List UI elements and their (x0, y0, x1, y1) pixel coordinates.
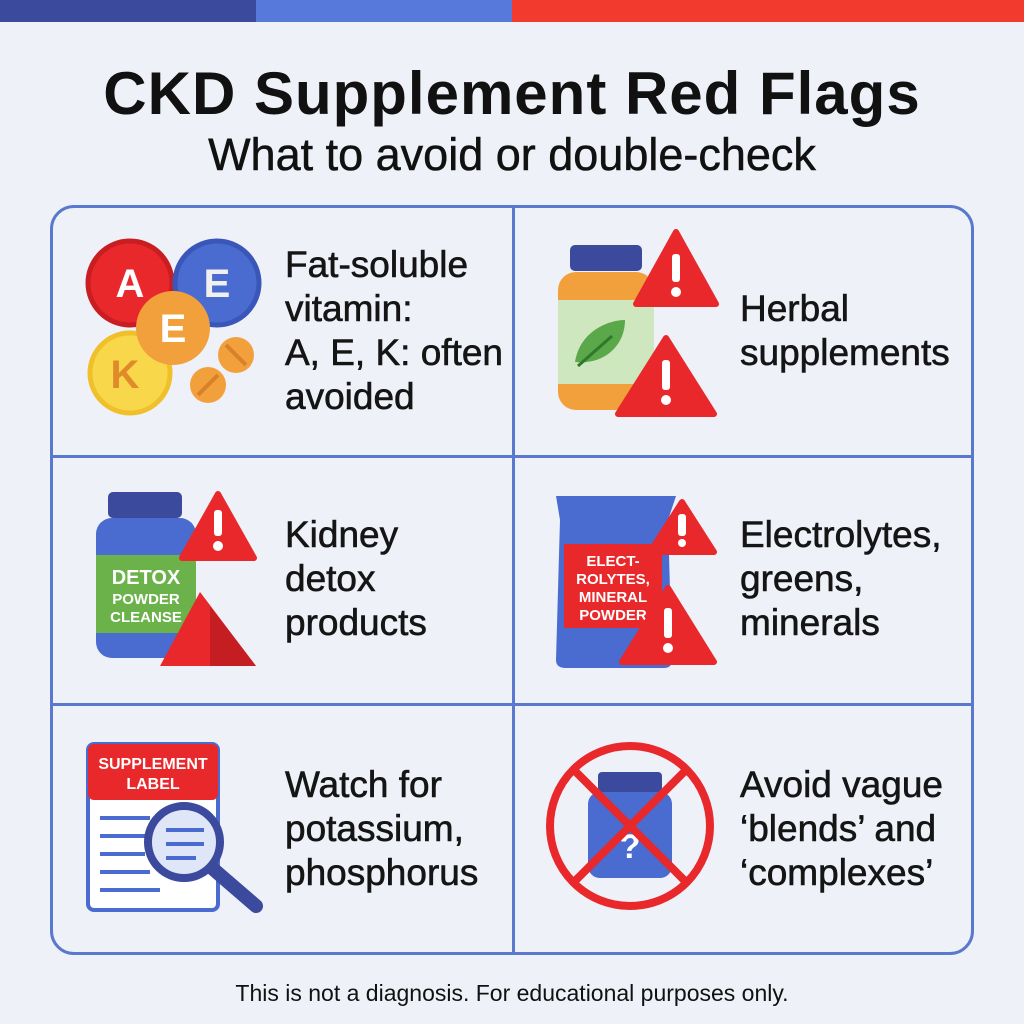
icon: supplement label with magnifier: SUPPLEMENT (98, 756, 208, 773)
icon: supplement label with magnifier (88, 744, 256, 910)
icon: detox bottle: POWDER (112, 591, 180, 608)
icon: supplement label with magnifier: LABEL (126, 776, 180, 793)
grid panel (50, 205, 974, 955)
icon: vitamins: E (204, 262, 230, 306)
text: herbal supplements: Herbal supplements (740, 288, 950, 373)
footer disclaimer: This is not a diagnosis. For educational purposes only. (235, 980, 789, 1006)
icon: electrolyte pouch: ROLYTES, (576, 571, 650, 588)
icon: electrolyte pouch: ELECT- (586, 553, 640, 570)
icon: prohibited blend jar: ? (620, 828, 640, 866)
text: fat-soluble vitamins: A, E, K: often avoided (285, 332, 503, 417)
subtitle: What to avoid or double-check (208, 129, 816, 180)
icon: vitamins: K (111, 353, 140, 397)
icon: vitamins: E (160, 307, 186, 351)
text: vague blends: Avoid vague ‘blends’ and ‘complexes’ (740, 764, 943, 893)
text: potassium phosphorus: Watch for potassium, phosphorus (285, 764, 478, 893)
title: CKD Supplement Red Flags (103, 60, 921, 127)
text: fat-soluble vitamins: Fat-soluble vitamin: (285, 244, 468, 329)
text: kidney detox: Kidney detox products (285, 514, 427, 643)
icon: detox bottle: DETOX (112, 567, 181, 589)
icon: electrolyte pouch: POWDER (579, 607, 647, 624)
icon: herbal bottle with warnings (558, 232, 716, 414)
icon: vitamins (88, 241, 259, 413)
icon: detox bottle (96, 492, 256, 666)
icon: vitamins: A (116, 262, 144, 306)
text: electrolytes: Electrolytes, greens, minerals (740, 514, 942, 643)
text: fat-soluble vitamins (284, 244, 503, 417)
top color bar (0, 0, 1024, 22)
icon: detox bottle: CLEANSE (110, 609, 182, 626)
icon: electrolyte pouch: MINERAL (579, 589, 647, 606)
icon: prohibited blend jar (550, 746, 710, 906)
icon: electrolyte pouch (556, 496, 714, 668)
